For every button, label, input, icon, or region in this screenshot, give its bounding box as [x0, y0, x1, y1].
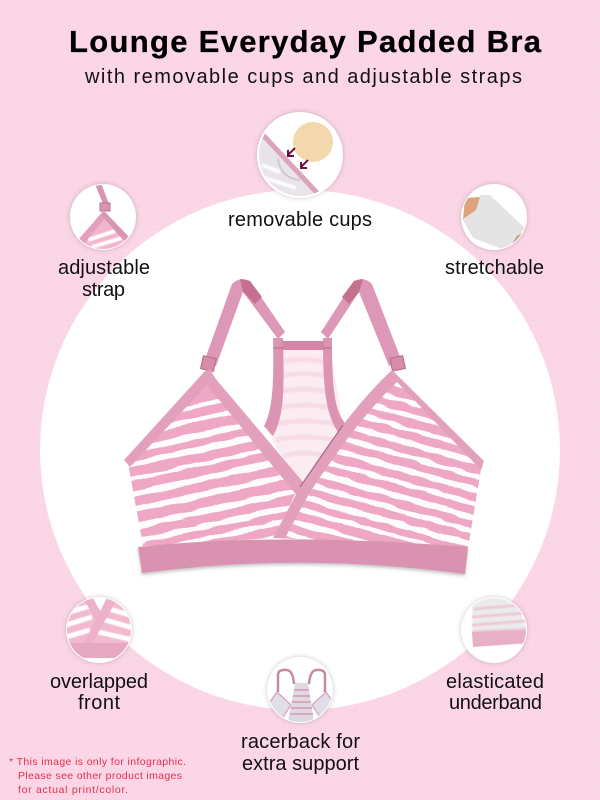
right cup print — [276, 382, 481, 548]
label — [58, 257, 150, 301]
elastic underband — [138, 540, 468, 574]
callout image — [267, 657, 336, 723]
disclaimer note: Please see other product images — [18, 770, 182, 782]
disclaimer note: * This image is only for infographic. — [9, 756, 186, 768]
label: front — [78, 692, 120, 714]
callout image — [70, 183, 136, 255]
label — [50, 671, 148, 714]
left strap — [204, 279, 285, 366]
large white circle — [40, 190, 560, 710]
feature: stretchable — [445, 184, 544, 279]
product: bra illustration — [120, 279, 490, 591]
feature: removable cups — [228, 112, 372, 231]
label: strap — [82, 279, 125, 301]
label — [446, 671, 544, 714]
disclaimer note — [9, 756, 186, 796]
label: removable cups — [228, 209, 372, 231]
strap adjusters — [201, 356, 405, 371]
label: overlapped — [50, 671, 148, 693]
left cup print — [128, 385, 296, 546]
label: extra support — [242, 753, 359, 775]
disclaimer note: for actual print/color. — [18, 784, 128, 796]
callout image — [461, 597, 527, 663]
callout image — [66, 597, 133, 663]
label: racerback for — [241, 731, 360, 753]
feature: adjustable strap — [58, 183, 150, 301]
back panel — [264, 338, 345, 490]
right cup binding — [273, 370, 484, 538]
title: Lounge Everyday Padded Bra — [69, 24, 542, 59]
label: stretchable — [445, 257, 544, 279]
label: elasticated — [446, 671, 544, 693]
label — [241, 731, 360, 775]
feature: overlapped front — [50, 597, 148, 714]
callout image — [461, 184, 527, 250]
left cup binding — [124, 369, 303, 497]
feature: racerback — [241, 657, 360, 775]
subtitle: with removable cups and adjustable straps — [84, 66, 522, 88]
feature: elasticated underband — [446, 597, 544, 714]
label: adjustable — [58, 257, 150, 279]
overlap shadow line — [300, 425, 343, 487]
callout image — [255, 112, 343, 198]
label: underband — [449, 692, 542, 714]
right strap — [321, 279, 402, 366]
